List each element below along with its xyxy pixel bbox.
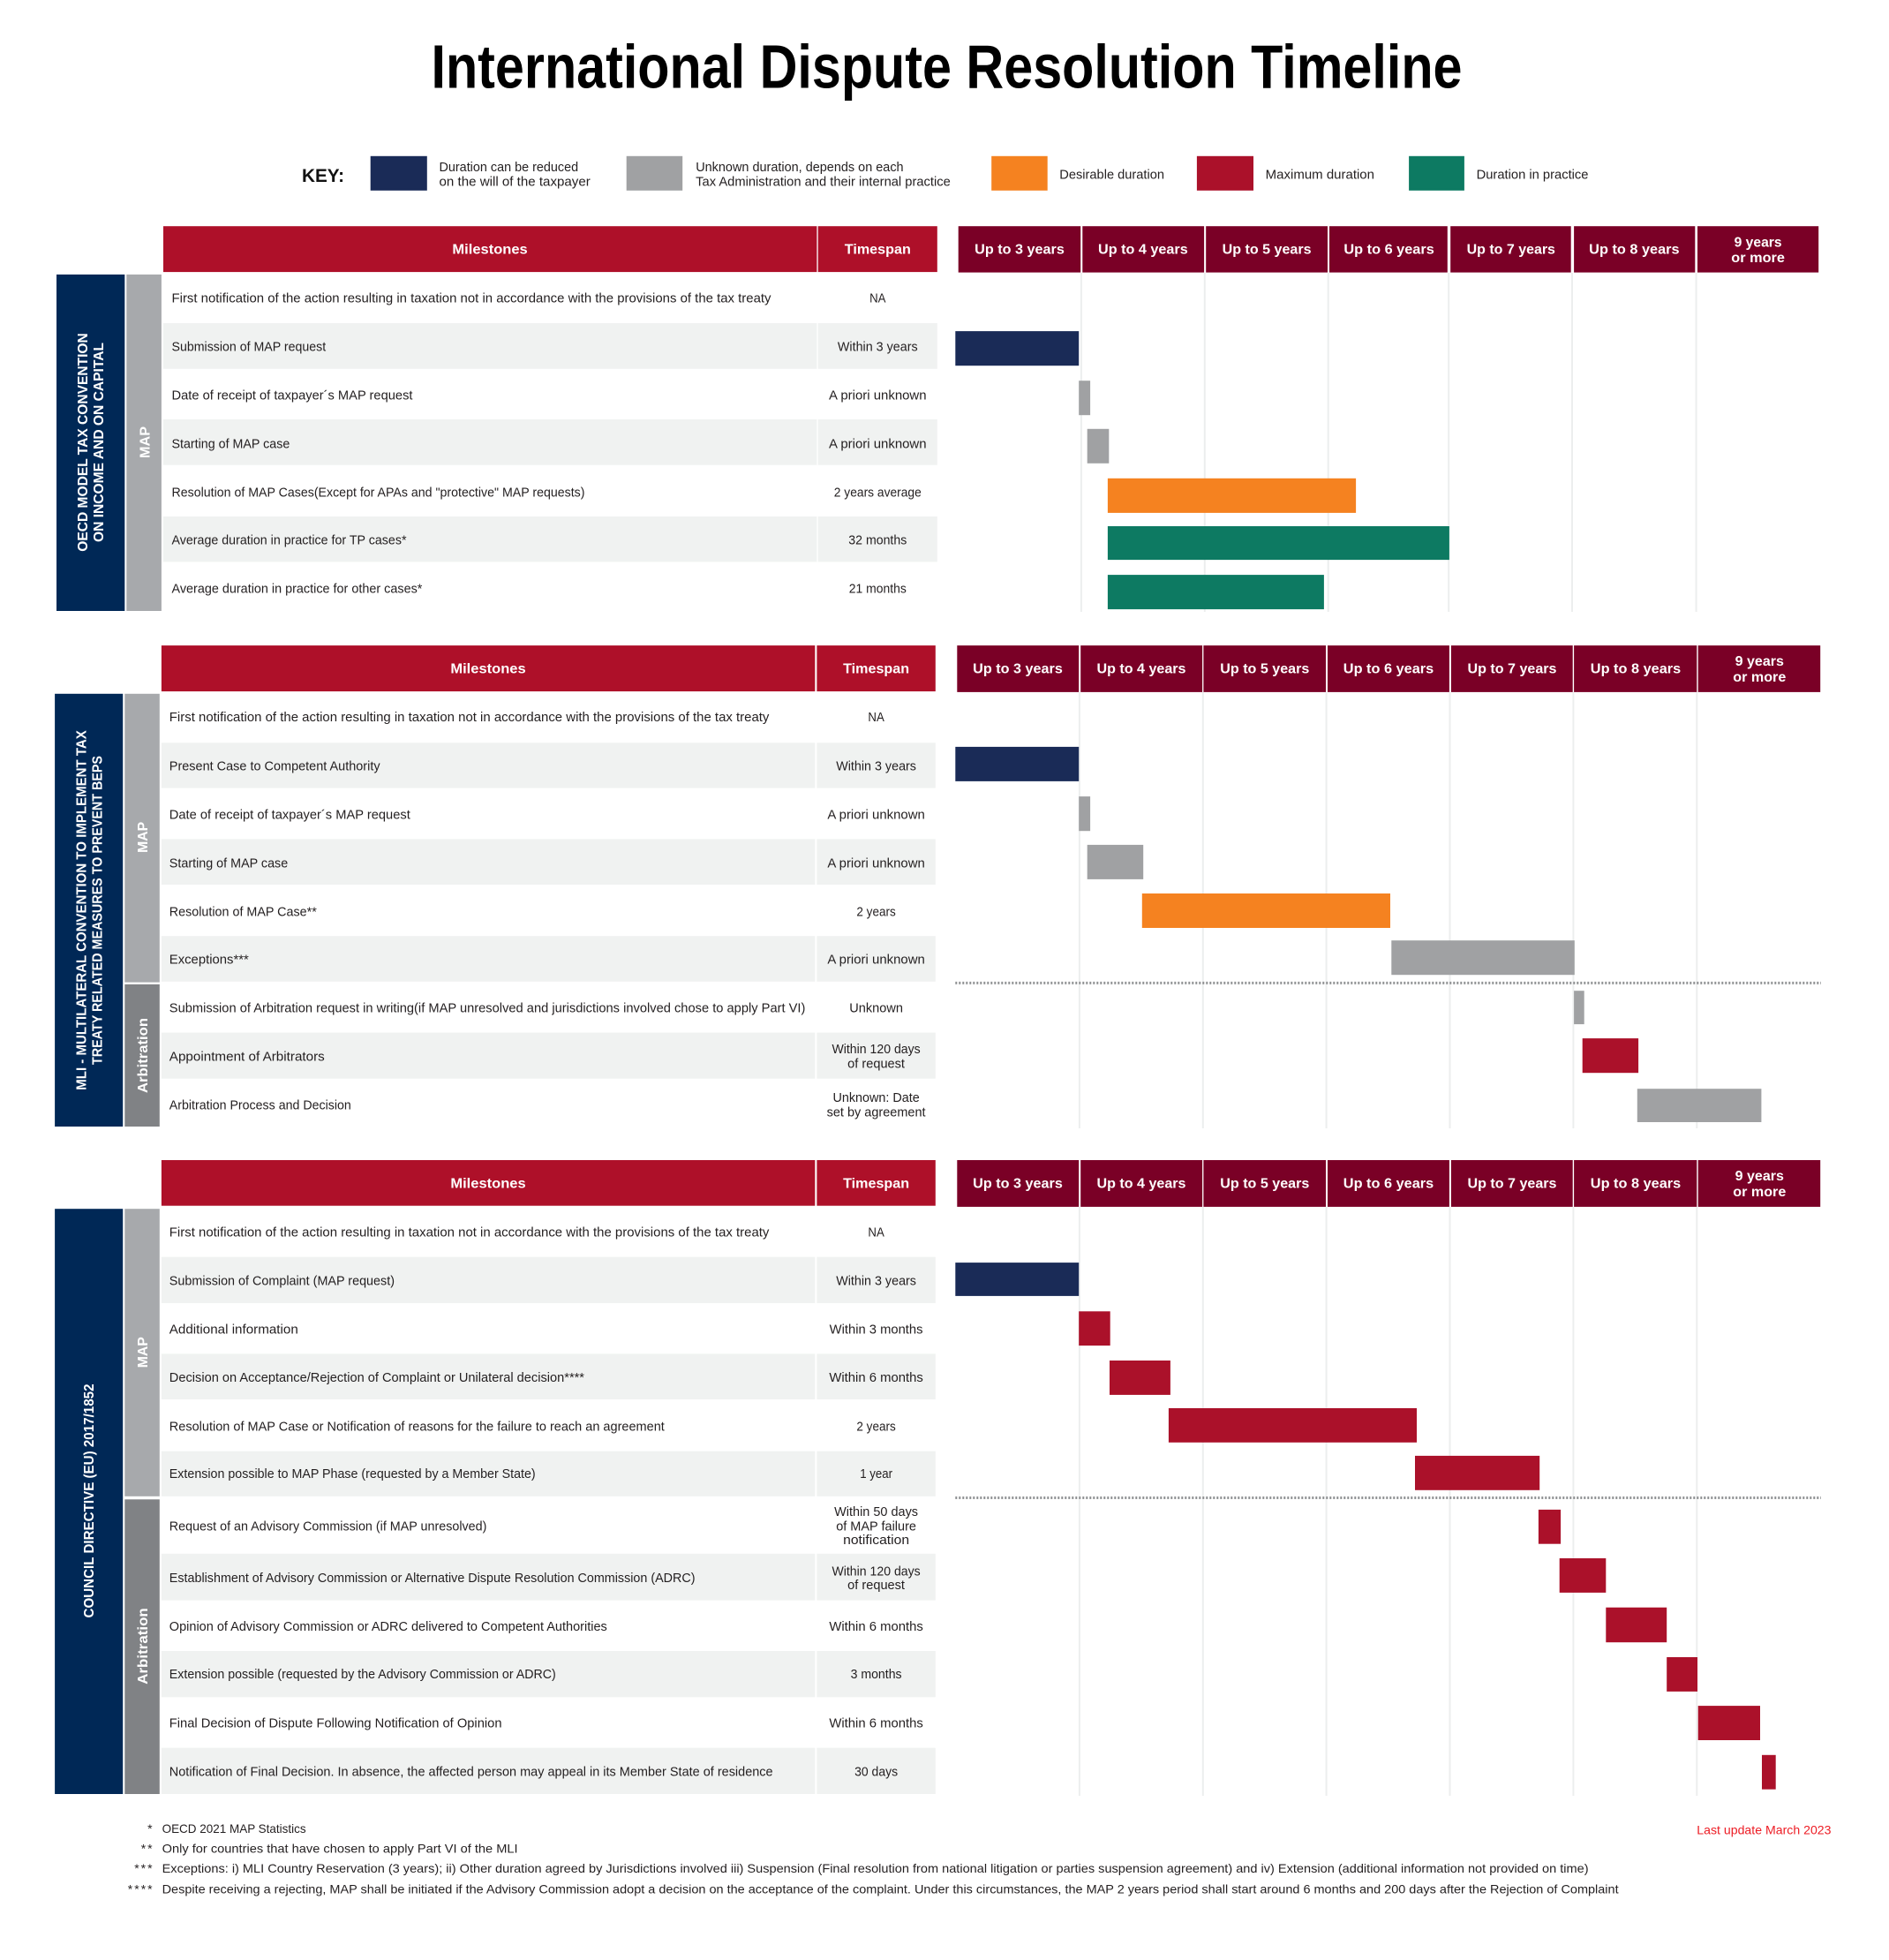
side label: Arbitration — [124, 1499, 160, 1794]
side label: Arbitration — [124, 984, 160, 1127]
row: resolution of MAP case — [169, 1420, 896, 1434]
row: establishment of advisory commission: of request — [847, 1579, 905, 1593]
table header — [162, 645, 936, 691]
legend item: unknown duration: Unknown duration, depends on each — [696, 161, 904, 175]
side label: MAP: MAP — [136, 822, 151, 853]
side label: OECD: ON INCOME AND ON CAPITAL — [92, 343, 107, 542]
row: decision on acceptance: Within 6 months — [829, 1371, 923, 1385]
row: submission of arbitration request: Submission of Arbitration request in writing(if MAP unresolved and jurisdictions involved chose to apply Part VI) — [169, 1001, 805, 1015]
row: TP cases — [163, 516, 937, 562]
side label: MAP — [124, 694, 160, 983]
row: extension possible — [162, 1651, 936, 1697]
row: extension possible: 3 months — [851, 1668, 902, 1682]
row: extension possible: Extension possible (requested by the Advisory Commission or ADRC) — [169, 1668, 556, 1682]
row: date of receipt: A priori unknown — [827, 808, 925, 822]
row: first notification: NA — [869, 291, 886, 305]
timeline header: Up to 8 years — [1591, 662, 1681, 676]
legend title: KEY: — [302, 166, 344, 186]
row: starting of MAP case: Starting of MAP case — [169, 856, 288, 871]
row: submission of MAP request: Within 3 years — [838, 341, 918, 355]
row: extension MAP phase: Extension possible to MAP Phase (requested by a Member State) — [169, 1467, 536, 1481]
row: submission of complaint: Submission of Complaint (MAP request) — [169, 1274, 395, 1288]
row: request of advisory commission: notification — [843, 1534, 909, 1548]
legend item: duration in practice: Duration in practice — [1477, 168, 1589, 182]
row: additional information — [169, 1323, 923, 1338]
row: arbitration process: set by agreement — [827, 1105, 926, 1119]
legend — [302, 156, 1589, 191]
row: exceptions: Exceptions*** — [169, 954, 249, 968]
row: opinion of advisory commission: Opinion of Advisory Commission or ADRC delivered to Competent Authorities — [169, 1620, 607, 1634]
title: International Dispute Resolution Timeline — [431, 33, 1462, 102]
row: resolution of MAP case: 2 years — [856, 905, 896, 919]
row: request of advisory commission: of MAP failure — [836, 1519, 916, 1534]
legend item: unknown duration — [627, 156, 951, 191]
row: notification of final decision: 30 days — [854, 1765, 898, 1779]
row: resolution of MAP case: Resolution of MAP Case or Notification of reasons for the failure to reach an agreement — [169, 1420, 665, 1434]
timeline header: Up to 5 years — [1220, 1176, 1309, 1192]
row: appointment of arbitrators — [162, 1033, 936, 1079]
row: first notification: First notification of the action resulting in taxation not in accordance with the provisions of the tax treaty — [169, 711, 770, 725]
table header: Milestones — [452, 242, 528, 258]
row: first notification: First notification of the action resulting in taxation not in accordance with the provisions of the tax treaty — [171, 291, 771, 305]
timeline header — [957, 645, 1820, 692]
row: arbitration process — [169, 1091, 926, 1119]
timeline header: 9 years — [1735, 235, 1782, 250]
row: notification of final decision: Notification of Final Decision. In absence, the affected person may appeal in its Member State of residence — [169, 1765, 773, 1779]
footnote 1: * — [147, 1821, 154, 1836]
footnote 2: Only for countries that have chosen to apply Part VI of the MLI — [162, 1842, 518, 1856]
row: request of advisory commission: Request of an Advisory Commission (if MAP unresolved) — [169, 1519, 486, 1534]
row: opinion of advisory commission: Within 6 months — [829, 1620, 923, 1634]
row: first notification: First notification of the action resulting in taxation not in accordance with the provisions of the tax treaty — [169, 1225, 770, 1240]
timeline header: or more — [1733, 670, 1787, 685]
timeline header: Up to 6 years — [1343, 242, 1434, 258]
timeline header — [959, 226, 1818, 273]
legend item: desirable duration: Desirable duration — [1059, 168, 1164, 182]
row: starting of MAP case: Starting of MAP case — [171, 437, 290, 451]
row: additional information: Additional information — [169, 1323, 298, 1338]
row: request of advisory commission — [169, 1505, 918, 1548]
row: resolution of MAP cases: 2 years average — [834, 486, 922, 500]
panel: Council Directive (EU) 2017/1852 — [55, 1160, 1821, 1796]
legend item: duration in practice — [1409, 156, 1589, 191]
row: establishment of advisory commission — [162, 1554, 936, 1601]
row: date of receipt: Date of receipt of taxpayer´s MAP request — [169, 808, 410, 822]
timeline header: Up to 5 years — [1220, 662, 1309, 676]
row: TP cases: Average duration in practice for TP cases* — [171, 534, 407, 548]
side label: MLI: MLI - MULTILATERAL CONVENTION TO IMPLEMENT TAX — [75, 730, 90, 1090]
table header: Timespan — [845, 242, 911, 258]
bars: Council Directive timeline — [955, 1263, 1776, 1790]
row: notification of final decision — [162, 1748, 936, 1794]
side label: MAP — [126, 275, 162, 611]
row: additional information: Within 3 months — [830, 1323, 923, 1338]
row: date of receipt — [169, 808, 925, 822]
timeline header: Up to 6 years — [1343, 1176, 1434, 1192]
row: resolution of MAP case — [169, 905, 896, 919]
row: resolution of MAP cases — [171, 486, 922, 500]
row: decision on acceptance — [162, 1353, 936, 1399]
legend item: desirable duration — [991, 156, 1164, 191]
side label: Council Directive — [55, 1209, 123, 1794]
row: starting of MAP case: A priori unknown — [829, 437, 927, 451]
panel: OECD model tax convention — [56, 226, 1818, 612]
row: resolution of MAP case: 2 years — [856, 1420, 896, 1434]
side label: MLI — [55, 694, 123, 1127]
row: date of receipt: Date of receipt of taxpayer´s MAP request — [171, 389, 413, 403]
row: extension MAP phase — [162, 1451, 936, 1496]
bars: MLI timeline — [955, 747, 1761, 1122]
timeline header: Up to 5 years — [1223, 242, 1312, 258]
footnote 2: ** — [141, 1842, 154, 1856]
timeline header: Up to 7 years — [1467, 662, 1557, 676]
row: request of advisory commission: Within 50 days — [834, 1505, 918, 1519]
row: appointment of arbitrators: Within 120 days — [832, 1043, 921, 1057]
row: exceptions: A priori unknown — [827, 954, 925, 968]
legend item: maximum duration — [1197, 156, 1374, 191]
timeline header: Up to 3 years — [973, 662, 1063, 676]
timeline header — [957, 1160, 1820, 1207]
side label: MAP: MAP — [138, 426, 153, 458]
table header — [163, 226, 937, 272]
row: submission of complaint: Within 3 years — [836, 1274, 916, 1288]
row: date of receipt: A priori unknown — [829, 389, 927, 403]
row: final decision: Within 6 months — [829, 1716, 923, 1730]
timeline header: Up to 4 years — [1096, 662, 1186, 676]
timeline header: Up to 6 years — [1343, 662, 1434, 676]
timeline header: Up to 4 years — [1096, 1176, 1186, 1192]
side label: OECD: OECD MODEL TAX CONVENTION — [76, 333, 91, 552]
side label: Arbitration: Arbitration — [136, 1018, 151, 1093]
legend item: unknown duration: Tax Administration and their internal practice — [696, 175, 951, 189]
row: TP cases: 32 months — [848, 534, 907, 548]
row: first notification: NA — [868, 711, 884, 725]
timeline header: Up to 7 years — [1467, 1176, 1557, 1192]
timeline header: 9 years — [1735, 1169, 1784, 1184]
timeline header: Up to 7 years — [1467, 242, 1555, 258]
row: establishment of advisory commission: Within 120 days — [832, 1564, 921, 1579]
bars: OECD timeline — [955, 331, 1449, 609]
row: other cases: 21 months — [849, 582, 907, 596]
row: starting of MAP case — [162, 839, 936, 885]
side label: Council Directive: COUNCIL DIRECTIVE (EU) 2017/1852 — [82, 1383, 97, 1617]
legend item: duration can be reduced: on the will of the taxpayer — [440, 175, 591, 189]
row: establishment of advisory commission: Establishment of Advisory Commission or Alternative Dispute Resolution Commission (ADRC) — [169, 1572, 696, 1586]
table header: Milestones — [450, 662, 526, 676]
row: extension MAP phase: 1 year — [860, 1467, 892, 1481]
row: exceptions — [162, 936, 936, 982]
row: date of receipt — [171, 389, 927, 403]
row: submission of complaint — [162, 1257, 936, 1303]
row: other cases — [171, 582, 907, 596]
footnote 3: *** — [134, 1861, 154, 1875]
row: appointment of arbitrators: of request — [847, 1057, 905, 1071]
legend item: duration can be reduced: Duration can be reduced — [440, 161, 578, 175]
row: final decision: Final Decision of Dispute Following Notification of Opinion — [169, 1716, 502, 1730]
row: appointment of arbitrators: Appointment of Arbitrators — [169, 1050, 325, 1064]
timeline header: Up to 8 years — [1589, 242, 1680, 258]
row: present case — [162, 743, 936, 788]
row: decision on acceptance: Decision on Acceptance/Rejection of Complaint or Unilateral decision**** — [169, 1371, 584, 1385]
side label: MAP: MAP — [136, 1337, 151, 1368]
timeline header: Up to 3 years — [973, 1176, 1063, 1192]
row: resolution of MAP cases: Resolution of MAP Cases(Except for APAs and "protective" MAP requests) — [171, 486, 584, 500]
row: final decision — [169, 1716, 923, 1730]
timeline header: Up to 4 years — [1098, 242, 1188, 258]
table header: Milestones — [450, 1176, 526, 1191]
row: starting of MAP case: A priori unknown — [827, 856, 925, 871]
row: first notification: NA — [868, 1225, 884, 1240]
timeline header: or more — [1731, 251, 1785, 266]
row: submission of arbitration request: Unknown — [849, 1001, 903, 1015]
row: other cases: Average duration in practice for other cases* — [171, 582, 423, 596]
side label: MLI: TREATY RELATED MEASURES TO PREVENT BEPS — [90, 756, 105, 1065]
table header: Timespan — [843, 1176, 909, 1191]
row: present case: Present Case to Competent Authority — [169, 759, 380, 773]
table header: Timespan — [843, 662, 909, 676]
row: resolution of MAP case: Resolution of MAP Case** — [169, 905, 317, 919]
row: starting of MAP case — [163, 419, 937, 465]
timeline header: Up to 3 years — [975, 242, 1065, 258]
footnote 4: **** — [128, 1881, 154, 1896]
timeline header: or more — [1733, 1185, 1787, 1200]
table header — [162, 1160, 936, 1206]
row: submission of MAP request — [163, 323, 937, 369]
panel: MLI multilateral convention — [55, 645, 1821, 1128]
side label: Arbitration: Arbitration — [136, 1608, 151, 1685]
side label: OECD — [56, 275, 124, 611]
footnotes — [128, 1821, 1619, 1896]
side label: MAP — [124, 1209, 160, 1496]
legend item: duration can be reduced — [371, 156, 591, 191]
footnote 1: OECD 2021 MAP Statistics — [162, 1821, 306, 1836]
row: opinion of advisory commission — [169, 1620, 923, 1634]
last update note: Last update March 2023 — [1697, 1823, 1832, 1837]
timeline header: Up to 8 years — [1591, 1176, 1681, 1192]
row: submission of MAP request: Submission of MAP request — [171, 341, 326, 355]
row: arbitration process: Arbitration Process and Decision — [169, 1098, 351, 1112]
footnote 4: Despite receiving a rejecting, MAP shall be initiated if the Advisory Commission adopt a decision on the acceptance of the complaint. Under this circumstances, the MAP 2 years period shall start around 6 months and 200 days after the Rejection of Complaint — [162, 1881, 1619, 1896]
timeline header: 9 years — [1735, 654, 1784, 669]
row: arbitration process: Unknown: Date — [832, 1091, 920, 1105]
footnote 3: Exceptions: i) MLI Country Reservation (3 years); ii) Other duration agreed by Jurisdictions involved iii) Suspension (Final resolution from national litigation or parties suspension agreement) and iv) Extension (additional information not provided on time) — [162, 1861, 1589, 1875]
row: present case: Within 3 years — [836, 759, 916, 773]
legend item: maximum duration: Maximum duration — [1266, 168, 1374, 182]
